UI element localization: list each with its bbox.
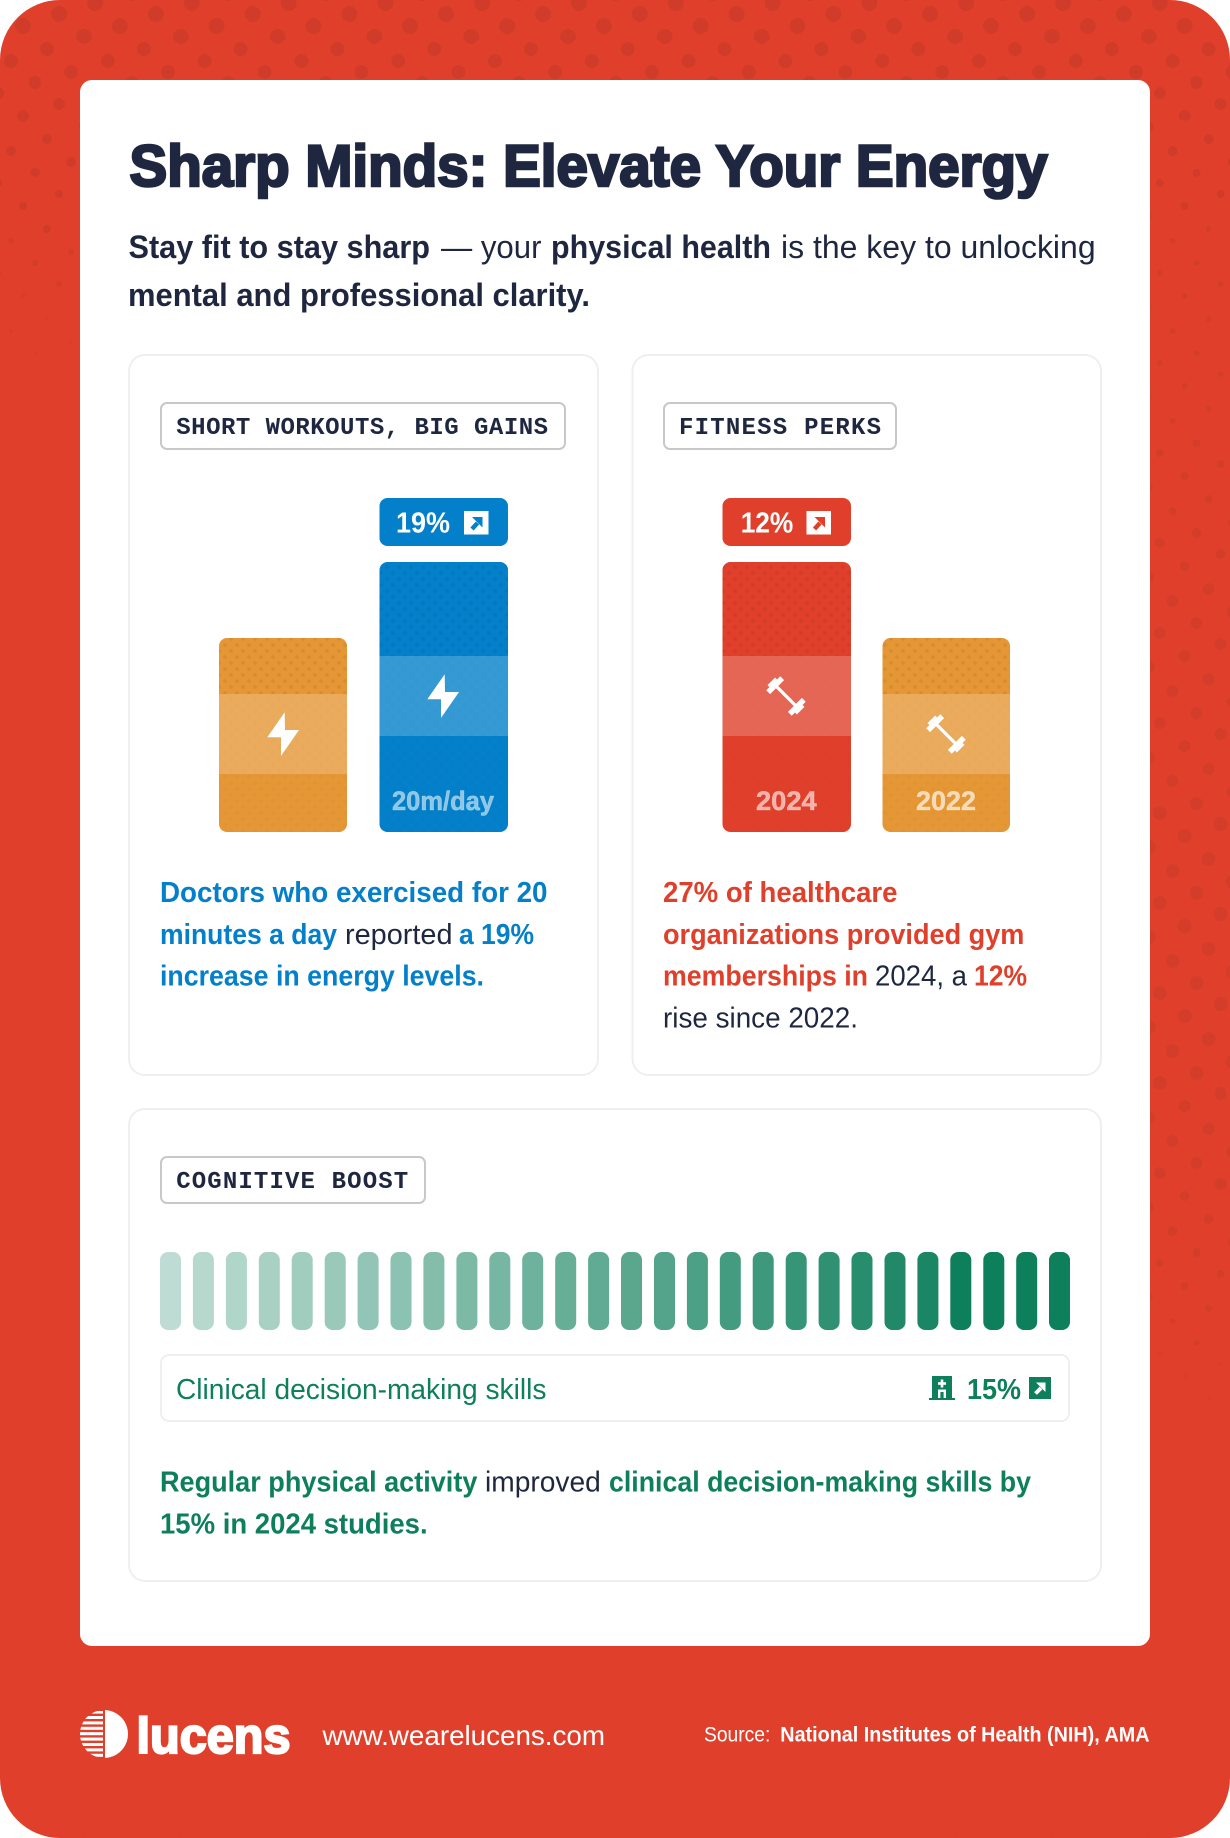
badge: 12% <box>722 498 851 546</box>
subtitle: physical health <box>551 229 771 265</box>
text: doctors stat: a 19% <box>459 919 534 951</box>
text: gym memberships stat: 2024, a <box>875 961 968 993</box>
text: clinical stat: improved <box>485 1467 601 1499</box>
subtitle: is the key to unlocking <box>781 229 1096 265</box>
tag: cognitive boost <box>161 1157 425 1203</box>
bar: 20 minutes per day: 20m/day <box>392 786 494 816</box>
white content card <box>80 80 1150 1646</box>
badge: 19% <box>380 498 508 546</box>
bar: 2022 <box>882 638 1010 832</box>
text: clinical stat: Regular physical activity <box>160 1467 477 1499</box>
panel: fitness perks <box>632 355 1101 1075</box>
panel: cognitive boost <box>129 1109 1101 1581</box>
text: gym memberships stat: memberships in <box>663 961 868 993</box>
tag: short workouts: SHORT WORKOUTS, BIG GAINS <box>176 415 548 442</box>
badge: 19%: 19% <box>396 508 450 540</box>
badge: 12%: 12% <box>741 508 793 540</box>
text: clinical stat: clinical decision-making skills by <box>609 1467 1031 1499</box>
tag: cognitive boost: COGNITIVE BOOST <box>176 1169 408 1196</box>
text: doctors stat: increase in energy levels. <box>160 961 484 993</box>
icon: up arrow square <box>806 511 831 534</box>
icon: dumbbell <box>924 712 968 756</box>
metric row: clinical decision-making <box>161 1355 1069 1421</box>
bar: baseline orange <box>219 638 347 832</box>
footer source: National Institutes of Health (NIH), AMA <box>780 1724 1150 1747</box>
icon: up arrow square <box>464 511 488 534</box>
bar: 2022: 2022 <box>916 786 976 816</box>
subtitle: Stay fit to stay sharp <box>128 229 430 265</box>
footer website: www.wearelucens.com <box>322 1720 605 1751</box>
text: doctors stat: reported <box>345 919 452 951</box>
text: gym memberships stat <box>663 877 1027 1035</box>
text: doctors stat: Doctors who exercised for 20 <box>160 877 548 909</box>
bar: 2024 <box>722 562 851 832</box>
tag: fitness perks <box>664 403 896 449</box>
icon: lightning bolt <box>427 674 459 718</box>
bar: 2024: 2024 <box>756 786 817 816</box>
footer logo: lucens <box>80 1710 290 1758</box>
gradient bar scale <box>160 1252 1070 1330</box>
text: gym memberships stat: rise since 2022. <box>663 1003 858 1035</box>
tag: short workouts <box>161 403 565 449</box>
title: Sharp Minds: Elevate Your Energy <box>130 134 1048 199</box>
icon: up arrow square <box>1029 1377 1051 1399</box>
footer logo: lucens: lucens <box>136 1708 290 1764</box>
icon: dumbbell <box>764 674 808 718</box>
text: gym memberships stat: organizations provided gym <box>663 919 1024 951</box>
subtitle: mental and professional clarity. <box>128 277 590 313</box>
text: clinical stat <box>160 1467 1031 1540</box>
footer source: Source: <box>704 1724 770 1747</box>
icon: hospital <box>929 1376 955 1400</box>
metric row: clinical decision-making: 15% <box>967 1374 1021 1406</box>
icon: lightning bolt <box>267 712 299 756</box>
subtitle: — your <box>441 229 542 265</box>
metric row: clinical decision-making: Clinical decision-making skills <box>176 1374 546 1406</box>
text: doctors stat: minutes a day <box>160 919 337 951</box>
tag: fitness perks: FITNESS PERKS <box>679 415 881 442</box>
text: gym memberships stat: 27% of healthcare <box>663 877 898 909</box>
panel: short workouts, big gains <box>129 355 598 1075</box>
text: doctors stat <box>160 877 548 993</box>
text: gym memberships stat: 12% <box>974 961 1027 993</box>
bar: 20 minutes per day <box>380 562 508 832</box>
subtitle <box>128 229 1096 313</box>
text: clinical stat: 15% in 2024 studies. <box>160 1508 428 1540</box>
